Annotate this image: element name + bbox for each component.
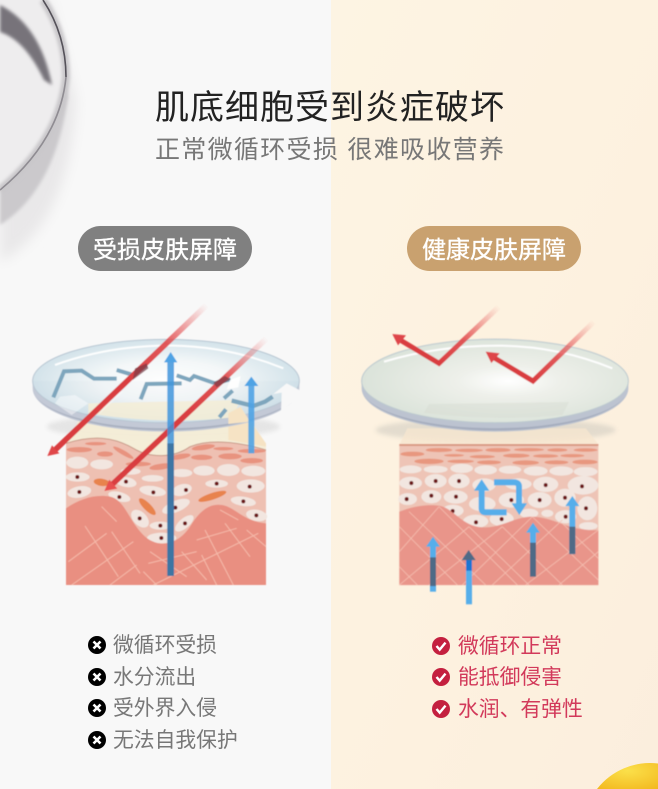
item: 微循环正常 <box>458 635 562 658</box>
list: damaged effects <box>88 634 238 752</box>
label: damaged barrier: 受损皮肤屏障 <box>93 237 237 264</box>
blue arrow 4 <box>565 496 579 554</box>
item: 受外界入侵 <box>113 697 217 720</box>
blue arrow 1 <box>426 537 440 592</box>
background: right panel <box>331 0 658 789</box>
diagram: healthy skin <box>362 307 628 604</box>
red reflected arrow left <box>392 307 499 363</box>
blue arrow long <box>164 352 177 576</box>
blue arrow 3 <box>526 523 540 577</box>
item: 水分流出 <box>113 666 196 689</box>
disc shadow <box>376 418 616 442</box>
decorative lemon <box>597 763 658 789</box>
flat cells <box>67 442 266 471</box>
diagram: damaged skin <box>33 305 299 585</box>
skin block <box>399 444 598 585</box>
disc shadow <box>47 414 280 439</box>
title: 肌底细胞受到炎症破坏 <box>155 89 504 127</box>
glass disc <box>33 339 299 432</box>
item: 水润、有弹性 <box>458 698 583 721</box>
red arrow long <box>47 305 207 456</box>
dermis fibers <box>68 507 266 585</box>
nuclei <box>75 475 258 540</box>
label: damaged barrier <box>78 226 252 271</box>
cells <box>66 457 268 543</box>
dermis <box>66 496 266 585</box>
blue cycle arrows <box>474 479 527 515</box>
glass disc <box>362 339 628 432</box>
item: 能抵御侵害 <box>458 666 562 689</box>
red arrow short <box>104 338 267 491</box>
disc cracks <box>53 365 273 417</box>
cream underlayer <box>66 400 266 456</box>
dermis lattice <box>399 507 598 585</box>
nuclei <box>405 479 588 524</box>
item: 无法自我保护 <box>113 729 238 752</box>
label: healthy barrier <box>407 226 581 271</box>
item: 微循环受损 <box>113 634 217 657</box>
label: healthy barrier: 健康皮肤屏障 <box>422 237 566 264</box>
cells <box>398 464 598 530</box>
decorative glass bowl <box>0 0 76 262</box>
orange cells <box>93 478 227 517</box>
subtitle: 正常微循环受损 很难吸收营养 <box>155 136 504 164</box>
skin block <box>66 438 266 585</box>
blue arrow short <box>244 377 258 453</box>
flat cells <box>400 448 598 465</box>
blue arrow 2 <box>462 550 476 604</box>
red reflected arrow right <box>486 322 594 381</box>
dermis <box>399 505 598 585</box>
list: healthy effects <box>432 635 583 721</box>
background: left panel <box>0 0 331 789</box>
